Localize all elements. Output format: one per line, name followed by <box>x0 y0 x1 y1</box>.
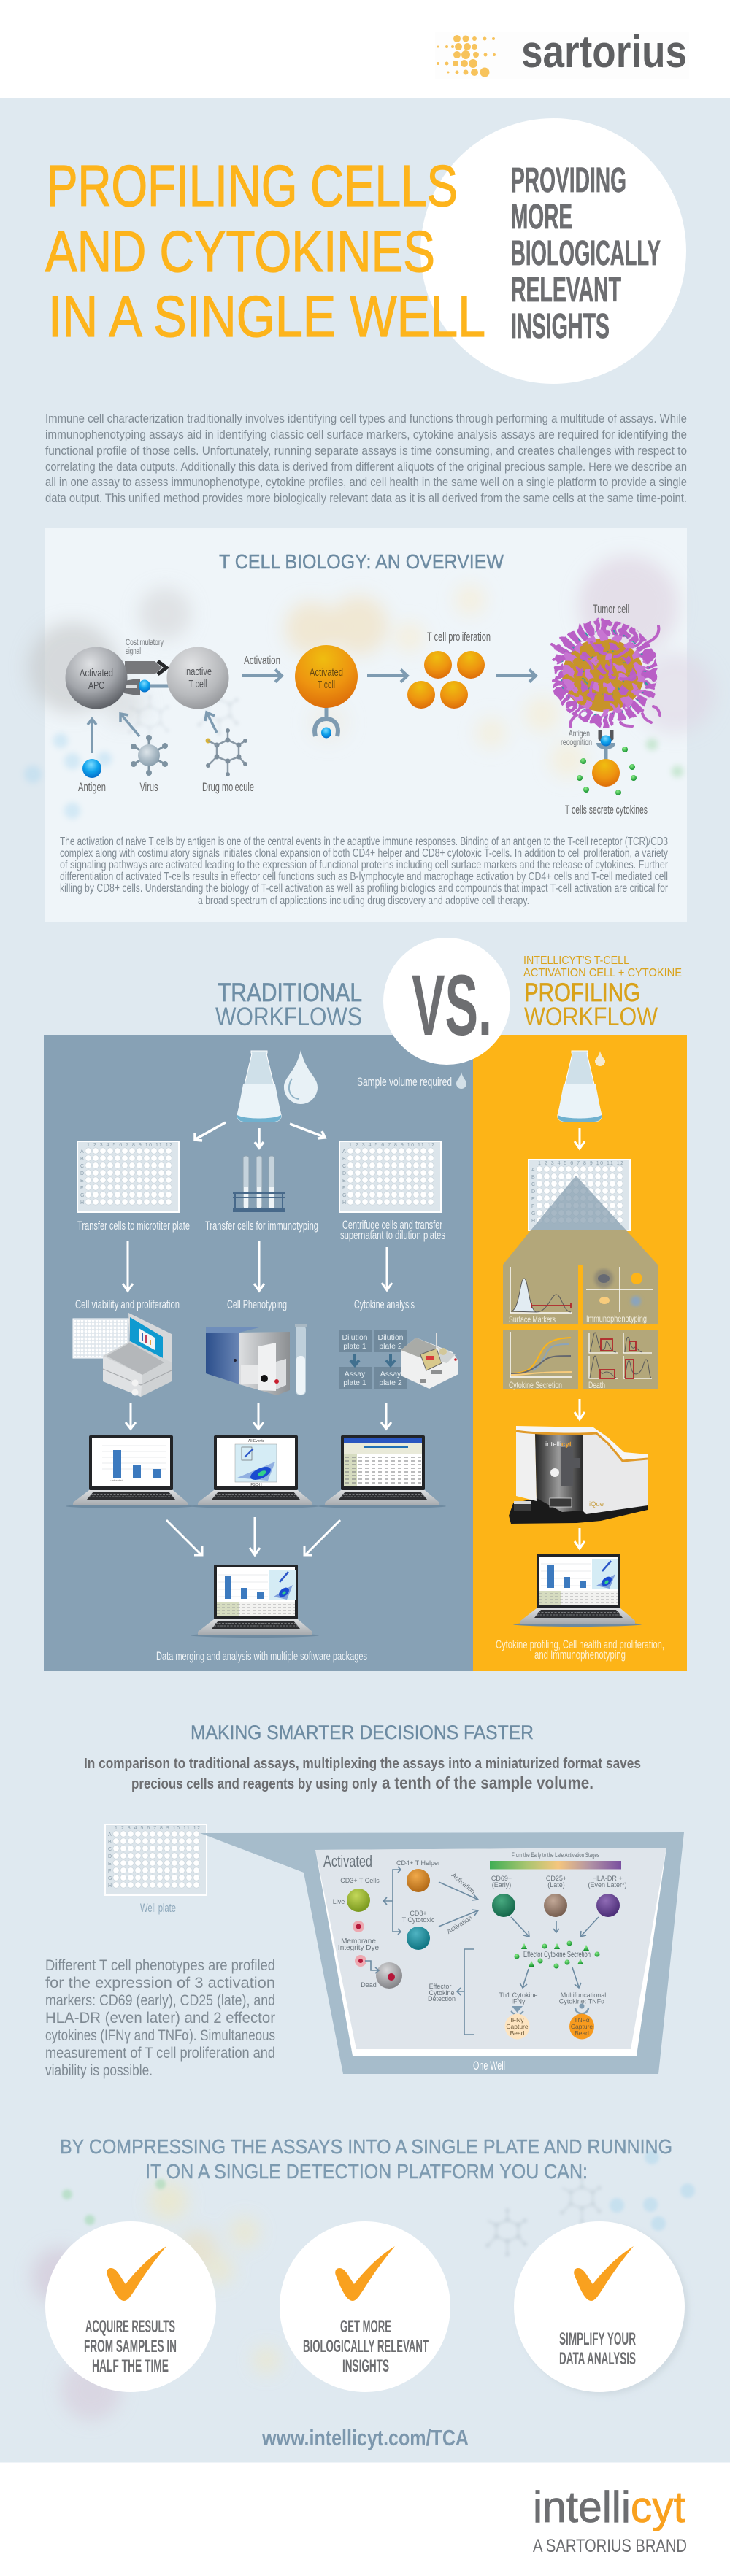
icon: check mark <box>107 2246 166 2301</box>
cell labels: Live <box>333 1898 345 1905</box>
rotated activation labels <box>445 1871 477 1935</box>
capture beads: Capture <box>506 2023 529 2030</box>
cell labels: CD4+ T Helper <box>396 1859 440 1867</box>
label: unified output <box>496 1638 664 1662</box>
label: sample volume required <box>357 1072 466 1089</box>
capture beads: Bead <box>575 2029 589 2037</box>
chart: surface markers: Surface Markers <box>509 1314 556 1324</box>
capture beads: Capture <box>571 2023 593 2030</box>
laptop: bar chart <box>66 1435 194 1508</box>
activation gradient bar <box>490 1851 621 1870</box>
cell labels: Membrane <box>341 1937 376 1946</box>
laptop: data table <box>318 1435 446 1508</box>
plate: single assay plate <box>529 1160 630 1230</box>
plate: well plate <box>105 1824 207 1895</box>
arrow: flask to plate <box>575 1128 585 1149</box>
intellicyt logo: intellicyt <box>533 2483 685 2531</box>
website url: www.intellicyt.com/TCA <box>261 2425 469 2450</box>
cell labels: Effector <box>429 1983 451 1990</box>
step labels: transfer: Transfer cells to microtiter plate <box>77 1219 190 1233</box>
panel: traditional workflows <box>44 1035 473 1671</box>
summary statement: In comparison to traditional assays, multiplexing the assays into a miniaturized format saves <box>84 1756 641 1772</box>
benefit text: SIMPLIFY YOUR <box>559 2329 636 2349</box>
arrows: flask to plates <box>195 1122 325 1148</box>
chart: cytokine secretion <box>509 1332 572 1390</box>
heading: compressing the assays <box>60 2135 672 2183</box>
step labels: transfer <box>77 1218 445 1242</box>
heading: making smarter decisions faster: MAKING SMARTER DECISIONS FASTER <box>191 1721 534 1743</box>
cell labels: Cytokine: TNFα <box>559 1998 604 2005</box>
laptop: merged data <box>191 1565 319 1638</box>
icon: sartorius dot mark <box>437 35 496 77</box>
benefit text: HALF THE TIME <box>92 2356 169 2376</box>
capture beads: IFNγ <box>511 2016 524 2024</box>
laptop: bar chart: untreated <box>111 1478 123 1482</box>
icon: plate reader with laptop <box>73 1313 172 1397</box>
icon: virus: Virus <box>140 780 158 794</box>
icon: iQue instrument: intellicyt <box>545 1441 572 1449</box>
icon: flask <box>558 1051 602 1122</box>
icon: flow cytometer <box>206 1327 290 1395</box>
chart: death: Death <box>588 1380 605 1390</box>
capture beads: Bead <box>510 2029 525 2037</box>
icon: check mark <box>335 2246 395 2301</box>
panel: profiling workflow <box>473 1035 687 1671</box>
label: data merging: Data merging and analysis with multiple software packages <box>156 1649 367 1663</box>
plate: well plate: ABCDEFGH <box>108 1832 112 1889</box>
step labels: transfer: supernatant to dilution plates <box>340 1228 445 1242</box>
icon: receptor <box>124 679 172 695</box>
phenotype text block: HLA-DR (even later) and 2 effector <box>45 2010 275 2027</box>
benefit text: ACQUIRE RESULTS <box>85 2317 175 2337</box>
laptop: unified output <box>513 1554 642 1627</box>
label: T cell proliferation: T cell proliferation <box>427 630 491 644</box>
cell labels: (Late) <box>548 1881 565 1889</box>
label: antigen recognition: Antigen <box>569 728 590 739</box>
activation gradient bar: From the Early to the Late Activation Stages <box>512 1851 599 1859</box>
icon: iQue instrument <box>509 1426 648 1524</box>
cell labels: T Cytotoxic <box>402 1916 435 1924</box>
icon: cytokine instrument <box>401 1333 458 1389</box>
cell labels: IFNγ <box>511 1998 526 2005</box>
blurred background decoration: lower section <box>31 2150 695 2421</box>
heading: compressing the assays: IT ON A SINGLE DETECTION PLATFORM YOU CAN: <box>145 2160 588 2183</box>
icon: iQue instrument: iQue <box>589 1500 604 1508</box>
benefit text <box>303 2317 429 2376</box>
label: costimulatory signal: signal <box>126 647 141 656</box>
benefit text: FROM SAMPLES IN <box>84 2337 177 2356</box>
capture beads: TNFα <box>574 2016 590 2024</box>
subtitle in circle: RELEVANT <box>511 271 621 309</box>
heading: compressing the assays: BY COMPRESSING THE ASSAYS INTO A SINGLE PLATE AND RUNNING <box>60 2135 672 2158</box>
logo wordmark: sartorius <box>521 27 687 77</box>
icon: antigen: Antigen <box>78 780 106 794</box>
VS circle: VS. <box>412 957 492 1054</box>
plate: single assay plate: ABCDEFGH <box>531 1168 535 1224</box>
summary statement: precious cells and reagents by using only <box>131 1776 378 1792</box>
benefit text: GET MORE <box>340 2317 391 2337</box>
title: IN A SINGLE WELL <box>48 284 485 349</box>
cell labels: Th1 Cytokine <box>499 1991 538 1999</box>
benefit text <box>84 2317 177 2376</box>
activated APC cell: APC <box>88 679 104 692</box>
sartorius logo <box>435 27 689 79</box>
activated APC cell <box>66 647 127 709</box>
heading: traditional workflows <box>215 979 362 1031</box>
subtitle in circle: INSIGHTS <box>511 307 610 346</box>
arrow: readouts to instrument <box>575 1399 585 1419</box>
chart: cytokine secretion: Cytokine Secretion <box>509 1380 562 1390</box>
dilution and assay plates: Assay <box>345 1370 366 1378</box>
title: PROFILING CELLS <box>47 153 458 218</box>
label: tumor cell: Tumor cell <box>593 602 629 616</box>
laptop: flow plot <box>191 1435 319 1508</box>
chart: death <box>588 1333 652 1390</box>
intellicyt logo <box>533 2483 687 2556</box>
cytokine secretion: Effector Cytokine Secretion <box>523 1951 591 1959</box>
chart: immunophenotyping: Immunophenotyping <box>586 1314 647 1324</box>
heading: profiling workflow <box>523 955 682 1031</box>
diagram arrows <box>365 1867 599 2035</box>
proliferating T cells <box>407 651 485 709</box>
heading: profiling workflow: ACTIVATION CELL + CYTOKINE <box>523 967 682 979</box>
inactive T cell: Inactive <box>184 666 212 678</box>
icon: small drop <box>595 1051 605 1066</box>
subtitle in circle: MORE <box>511 198 572 236</box>
label: unified output: and Immunophenotyping <box>534 1648 626 1662</box>
tumor cell illustration <box>552 621 660 727</box>
plate: single assay plate: 1 2 3 4 5 6 7 8 9 10 11 12 <box>538 1161 623 1166</box>
dilution and assay plates: Dilution <box>377 1333 404 1342</box>
cell labels: Cytokine <box>429 1989 455 1997</box>
icon: test tubes in rack <box>233 1156 285 1212</box>
brand tagline: A SARTORIUS BRAND <box>533 2536 687 2556</box>
plate: microtiter <box>77 1141 179 1212</box>
arrow: activation <box>242 670 282 682</box>
phenotype text block: cytokines (IFNγ and TNFα). Simultaneous <box>45 2027 275 2044</box>
benefit text: BIOLOGICALLY RELEVANT <box>303 2337 429 2356</box>
cell labels <box>333 1859 627 2005</box>
summary statement <box>84 1756 641 1792</box>
arrows: merge to one laptop <box>166 1517 340 1555</box>
heading: traditional workflows: TRADITIONAL <box>218 979 362 1007</box>
inactive T cell <box>166 647 229 709</box>
label: activated: Activated <box>323 1852 372 1870</box>
arrows: assays to laptops <box>126 1403 391 1429</box>
label: costimulatory signal: Costimulatory <box>126 639 164 647</box>
chart: surface markers <box>509 1267 572 1324</box>
label: T cells secrete cytokines: T cells secrete cytokines <box>565 803 648 817</box>
subtitle in circle <box>511 161 661 346</box>
icon: check mark <box>574 2246 634 2301</box>
cell labels: Dead <box>361 1981 377 1989</box>
step labels: assays: Cell Phenotyping <box>227 1297 287 1311</box>
title: AND CYTOKINES <box>45 219 435 284</box>
icon: flask <box>237 1051 281 1122</box>
one well diagram <box>200 1832 684 2074</box>
plate: well plate: 1 2 3 4 5 6 7 8 9 10 11 12 <box>115 1826 200 1831</box>
cell labels: CD69+ <box>491 1875 512 1882</box>
phenotype text block: viability is possible. <box>45 2062 153 2079</box>
panel: T cell biology overview <box>24 528 715 922</box>
activated T cell: T cell <box>318 679 335 691</box>
cytokine dots <box>577 747 637 795</box>
subtitle in circle: PROVIDING <box>511 161 626 200</box>
label: one well: One Well <box>473 2059 505 2072</box>
step labels: transfer: Transfer cells for immunotyping <box>205 1219 318 1233</box>
cell labels: CD3+ T Cells <box>340 1877 380 1884</box>
benefit: simplify data analysis <box>514 2221 688 2395</box>
inactive T cell: T cell <box>188 678 207 690</box>
intro text block <box>45 412 687 505</box>
cell labels: Multifuncational <box>561 1991 606 1999</box>
rotated activation labels: Activation <box>450 1871 477 1895</box>
plate: dilution: 1 2 3 4 5 6 7 8 9 10 11 12 <box>349 1143 434 1148</box>
cell labels: Detection <box>428 1995 456 2002</box>
plate: dilution: ABCDEFGH <box>342 1149 346 1206</box>
laptop: flow plot: All Events <box>248 1439 265 1443</box>
icon: virus <box>120 714 168 794</box>
icon: drug molecule <box>202 712 254 794</box>
label: costimulatory signal <box>126 639 164 656</box>
VS circle <box>383 938 510 1065</box>
summary statement: a tenth of the sample volume. <box>382 1773 593 1792</box>
overview text block <box>60 836 668 907</box>
cell spheres <box>347 1869 620 1989</box>
benefit text: DATA ANALYSIS <box>559 2349 636 2369</box>
label: activation: Activation <box>244 655 280 667</box>
heading: profiling workflow: INTELLICYT'S T-CELL <box>523 955 629 967</box>
step labels: assays <box>75 1297 415 1311</box>
phenotype text block <box>45 1957 275 2079</box>
cell labels: CD25+ <box>546 1875 566 1882</box>
plate: microtiter: ABCDEFGH <box>80 1149 84 1206</box>
rotated activation labels: Activation <box>445 1914 474 1935</box>
dilution and assay plates: plate 2 <box>379 1342 402 1351</box>
title <box>45 153 485 349</box>
benefit: biologically relevant insights <box>280 2221 450 2392</box>
capture beads <box>505 2004 594 2039</box>
activated T cell: Activated <box>310 666 343 679</box>
chart: immunophenotyping <box>586 1267 653 1324</box>
step labels: transfer: Centrifuge cells and transfer <box>342 1218 442 1232</box>
icon: tube <box>295 1324 307 1395</box>
benefit text: INSIGHTS <box>342 2356 389 2376</box>
heading: T CELL BIOLOGY: AN OVERVIEW <box>219 550 504 573</box>
label: sample volume required: Sample volume required <box>357 1075 452 1089</box>
cell labels: (Even Later*) <box>588 1881 627 1889</box>
blurred background decoration <box>28 556 715 777</box>
dilution and assay plates: Dilution <box>342 1333 368 1342</box>
activated APC cell: Activated <box>80 667 113 679</box>
plate: dilution <box>339 1141 441 1212</box>
heading: profiling workflow: PROFILING <box>524 979 640 1007</box>
dilution and assay plates: Assay <box>380 1370 402 1378</box>
step labels: assays: Cytokine analysis <box>354 1297 415 1311</box>
icon: large sample drop <box>284 1050 318 1104</box>
icon: drug molecule: Drug molecule <box>202 780 254 794</box>
plate: microtiter: 1 2 3 4 5 6 7 8 9 10 11 12 <box>87 1143 172 1148</box>
step labels: assays: Cell viability and proliferation <box>75 1297 180 1311</box>
cell labels: CD8+ <box>410 1910 427 1917</box>
arrows: plates to assays <box>123 1241 392 1291</box>
cytokine secretion <box>514 1941 600 1969</box>
arrow: instrument to laptop <box>575 1528 585 1549</box>
zoom beam from well <box>531 1176 626 1230</box>
icon: costimulatory arrow <box>125 661 166 674</box>
laptop: flow plot: FSC-H <box>250 1483 262 1487</box>
phenotype text block: for the expression of 3 activation <box>45 1975 275 1991</box>
benefit: acquire results <box>45 2221 216 2392</box>
antigen recognition: T cell receptor <box>592 730 620 787</box>
label: well plate: Well plate <box>140 1901 176 1915</box>
icon: antigen <box>78 719 106 794</box>
phenotype text block: Different T cell phenotypes are profiled <box>45 1957 275 1974</box>
label: antigen recognition <box>561 728 592 747</box>
arrow: to tumor cell <box>496 670 536 682</box>
dilution and assay plates <box>339 1330 407 1389</box>
label: antigen recognition: recognition <box>561 737 592 747</box>
cell labels: (Early) <box>492 1881 511 1889</box>
phenotype text block: measurement of T cell proliferation and <box>45 2045 275 2062</box>
cell labels: HLA-DR + <box>592 1875 623 1882</box>
overview text block: a broad spectrum of applications including drug discovery and adoptive cell therapy. <box>198 895 529 907</box>
cell labels: Integrity Dye <box>338 1944 380 1952</box>
heading: traditional workflows: WORKFLOWS <box>215 1003 362 1031</box>
benefit text <box>559 2329 636 2369</box>
phenotype text block: markers: CD69 (early), CD25 (late), and <box>45 1992 275 2009</box>
dilution and assay plates: plate 2 <box>379 1378 402 1387</box>
heading: profiling workflow: WORKFLOW <box>524 1003 658 1031</box>
dilution and assay plates: plate 1 <box>343 1378 366 1387</box>
multiplex readouts <box>503 1230 658 1390</box>
arrow: to proliferation <box>367 670 407 682</box>
white circle: insights <box>420 118 686 384</box>
activated T cell <box>295 645 358 739</box>
dilution and assay plates: plate 1 <box>343 1342 366 1351</box>
